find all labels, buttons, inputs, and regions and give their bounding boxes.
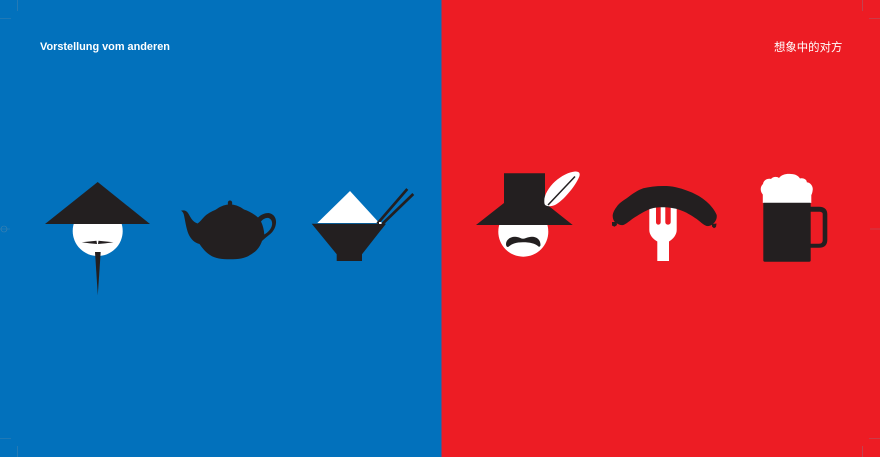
panel: blue xyxy=(0,0,442,457)
panel: red xyxy=(442,0,880,457)
icon: sausage on fork xyxy=(612,186,717,261)
icon: Chinese man with conical hat xyxy=(45,182,150,295)
heading: Chinese title: 想象中的对方 xyxy=(774,40,842,54)
icon: beer mug xyxy=(761,174,827,262)
heading: German title: Vorstellung vom anderen xyxy=(40,41,170,53)
icon: teapot xyxy=(181,200,276,259)
icon: rice bowl with chopsticks xyxy=(312,189,413,261)
icon: Bavarian man with hat and feather xyxy=(476,171,580,257)
